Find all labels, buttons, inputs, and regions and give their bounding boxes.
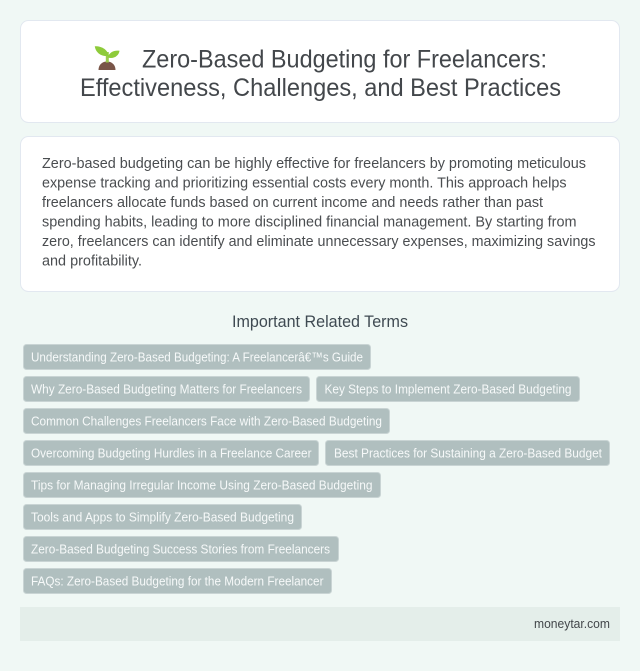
tag: why it matters: Why Zero-Based Budgeting Matters for Freelancers — [31, 382, 302, 396]
tag: understanding — [24, 344, 370, 370]
summary text: freelancers allocate funds based on current income and needs rather than past — [42, 194, 544, 211]
tag: tools and apps: Tools and Apps to Simplify Zero-Based Budgeting — [31, 510, 294, 524]
tag: tools and apps — [24, 504, 302, 530]
tag: key steps: Key Steps to Implement Zero-Based Budgeting — [324, 382, 572, 396]
title heading — [80, 46, 561, 102]
tag: key steps — [316, 376, 580, 402]
tag: best practices — [326, 440, 610, 466]
tag: why it matters — [24, 376, 310, 402]
tag: success stories: Zero-Based Budgeting Success Stories from Freelancers — [31, 542, 330, 556]
tag: faqs — [24, 568, 332, 594]
icon: sprout — [95, 46, 120, 70]
summary text: Zero-based budgeting can be highly effective for freelancers by promoting meticulous — [42, 155, 586, 172]
summary card — [20, 136, 620, 292]
tag: irregular income: Tips for Managing Irregular Income Using Zero-Based Budgeting — [31, 478, 372, 492]
footer bar — [20, 607, 620, 641]
summary text — [42, 155, 596, 270]
tag: common challenges — [24, 408, 390, 434]
summary text: spending habits, leading to more disciplined financial management. By starting from — [42, 214, 576, 230]
tag: irregular income — [24, 472, 380, 498]
footer source text: moneytar.com — [534, 617, 610, 631]
title card — [20, 20, 620, 122]
tag: success stories — [24, 536, 338, 562]
related terms heading: Important Related Terms — [232, 313, 408, 331]
related terms tags — [24, 344, 610, 594]
summary text: and profitability. — [42, 252, 142, 270]
panel: title — [20, 20, 620, 122]
panel: summary — [20, 136, 620, 292]
summary text: expense tracking and prioritizing essential costs every month. This approach helps — [42, 174, 566, 192]
title heading: Effectiveness, Challenges, and Best Practices — [80, 74, 561, 102]
tag: faqs: FAQs: Zero-Based Budgeting for the Modern Freelancer — [31, 574, 324, 588]
tag: overcoming hurdles: Overcoming Budgeting Hurdles in a Freelance Career — [31, 446, 312, 460]
title heading: Zero-Based Budgeting for Freelancers: — [142, 46, 547, 74]
tag: best practices: Best Practices for Sustaining a Zero-Based Budget — [334, 446, 602, 460]
tag: understanding: Understanding Zero-Based Budgeting: A Freelancerâ€™s Guide — [31, 350, 363, 364]
footer — [20, 607, 620, 641]
tag: common challenges: Common Challenges Freelancers Face with Zero-Based Budgeting — [31, 414, 382, 428]
tag: overcoming hurdles — [24, 440, 318, 466]
summary text: zero, freelancers can identify and eliminate unnecessary expenses, maximizing savings — [42, 233, 596, 250]
